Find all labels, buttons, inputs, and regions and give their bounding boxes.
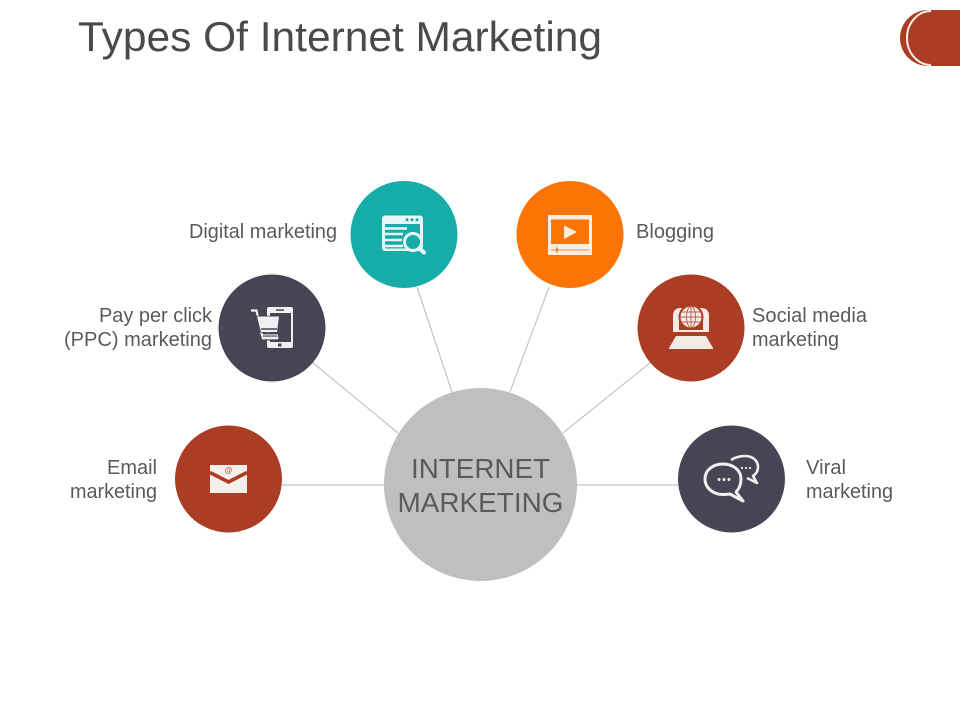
label: viral: Viral bbox=[806, 457, 846, 479]
label: pay per click: (PPC) marketing bbox=[64, 329, 212, 351]
label: viral: marketing bbox=[806, 481, 893, 503]
node: digital marketing bbox=[350, 181, 458, 288]
node: blogging bbox=[516, 181, 624, 288]
label: blogging: Blogging bbox=[636, 221, 714, 243]
label: pay per click: Pay per click bbox=[99, 305, 213, 327]
icon: video player bbox=[548, 215, 592, 255]
icon: shopping cart and phone bbox=[251, 307, 293, 348]
corner tab decoration bbox=[900, 10, 960, 66]
icon: envelope: @ bbox=[224, 466, 233, 475]
node: pay per click bbox=[218, 274, 326, 382]
label: email: Email bbox=[107, 457, 157, 479]
icon: speech bubbles bbox=[705, 456, 758, 501]
connector lines bbox=[282, 287, 678, 485]
center hub: internet marketing bbox=[384, 388, 577, 581]
label: email bbox=[70, 457, 157, 503]
node: email bbox=[175, 426, 282, 532]
center hub: internet marketing: MARKETING bbox=[398, 487, 564, 518]
label: social media: marketing bbox=[752, 329, 839, 351]
label: social media bbox=[752, 305, 868, 351]
icon: globe on laptop bbox=[669, 304, 713, 349]
title: Types Of Internet Marketing bbox=[78, 13, 602, 60]
label: email: marketing bbox=[70, 481, 157, 503]
node: social media bbox=[638, 274, 744, 382]
label: viral bbox=[806, 457, 893, 503]
center hub: internet marketing: INTERNET bbox=[411, 453, 550, 484]
label: social media: Social media bbox=[752, 305, 868, 327]
icon: browser with magnifier bbox=[382, 216, 424, 252]
label: pay per click bbox=[64, 305, 213, 351]
node: viral bbox=[678, 426, 785, 532]
label: digital marketing: Digital marketing bbox=[189, 221, 337, 243]
